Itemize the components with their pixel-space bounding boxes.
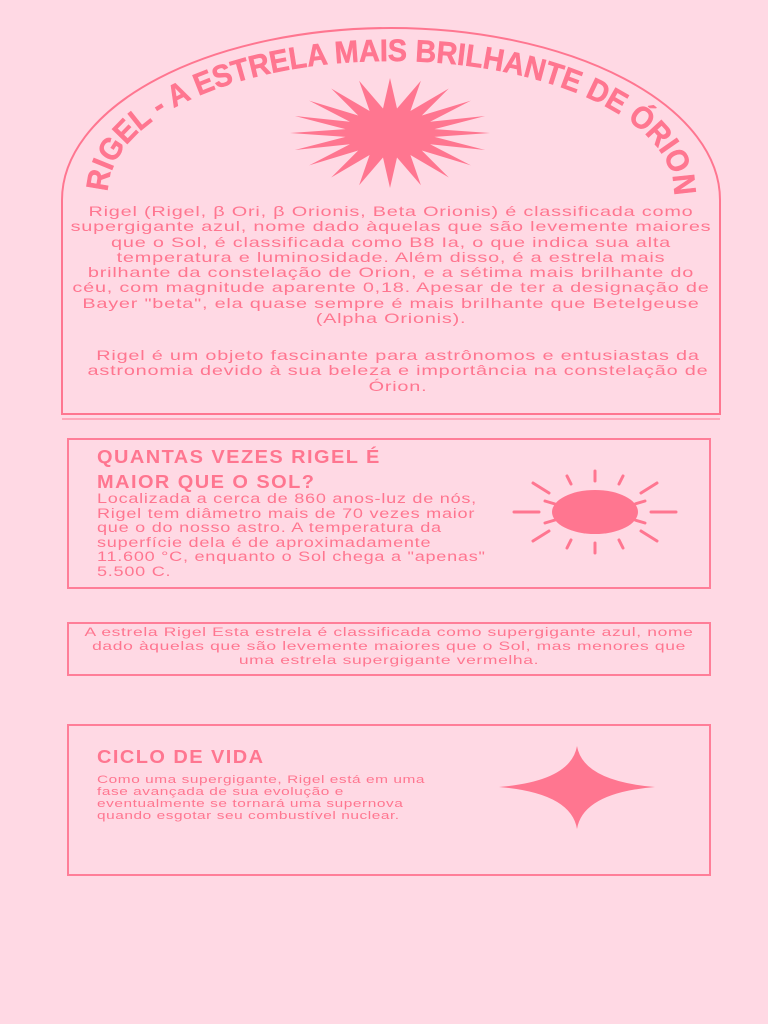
text block: eventualmente se tornará uma supernova <box>97 798 403 810</box>
intro paragraph: brilhante da constelação de Orion, e a sétima mais brilhante do <box>88 264 694 280</box>
icon: sun <box>512 470 678 554</box>
intro paragraph: supergigante azul, nome dado àquelas que são levemente maiores <box>71 218 711 234</box>
second paragraph: Rigel é um objeto fascinante para astrônomos e entusiastas da <box>96 347 700 363</box>
text block <box>97 774 425 822</box>
second paragraph <box>88 347 708 394</box>
heading <box>97 446 381 492</box>
intro paragraph: que o Sol, é classificada como B8 Ia, o que indica sua alta <box>111 234 671 250</box>
second paragraph: Órion. <box>369 378 427 394</box>
arch panel frame <box>61 27 721 420</box>
text block: 11.600 °C, enquanto o Sol chega a "apenas" <box>97 549 486 564</box>
icon: four-point star <box>500 746 654 829</box>
intro paragraph: Rigel (Rigel, β Ori, β Orionis, Beta Orionis) é classificada como <box>88 203 694 219</box>
text block: Rigel tem diâmetro mais de 70 vezes maior <box>97 506 475 520</box>
panel: size comparison <box>67 438 711 589</box>
intro paragraph <box>71 203 711 326</box>
text block: quando esgotar seu combustível nuclear. <box>97 810 400 822</box>
text block <box>97 491 486 578</box>
text block: que o do nosso astro. A temperatura da <box>97 520 442 535</box>
text block: Como uma supergigante, Rigel está em uma <box>97 774 425 786</box>
heading: MAIOR QUE O SOL? <box>97 472 315 492</box>
intro paragraph: Bayer "beta", ela quase sempre é mais brilhante que Betelgeuse <box>82 295 700 311</box>
second paragraph: astronomia devido à sua beleza e importância na constelação de <box>88 362 708 378</box>
text block: Localizada a cerca de 860 anos-luz de nós, <box>97 491 477 506</box>
intro paragraph: (Alpha Orionis). <box>316 310 466 326</box>
text block: 5.500 C. <box>97 564 171 578</box>
text block: fase avançada de sua evolução e <box>97 786 344 798</box>
text block: superfície dela é de aproximadamente <box>97 534 431 550</box>
intro paragraph: temperatura e luminosidade. Além disso, é a estrela mais <box>117 249 665 265</box>
text block <box>84 625 693 667</box>
panel: life cycle <box>67 724 711 876</box>
intro paragraph: céu, com magnitude aparente 0,18. Apesar de ter a designação de <box>72 279 710 295</box>
icon: starburst <box>290 78 490 188</box>
heading: QUANTAS VEZES RIGEL É <box>97 447 381 467</box>
title: RIGEL - A ESTRELA MAIS BRILHANTE DE ÓRION <box>86 39 696 194</box>
text block: uma estrela supergigante vermelha. <box>239 653 539 667</box>
text block: A estrela Rigel Esta estrela é classificada como supergigante azul, nome <box>85 625 693 639</box>
text block: dado àquelas que são levemente maiores que o Sol, mas menores que <box>92 639 686 653</box>
panel: classification note <box>67 622 711 676</box>
heading: CICLO DE VIDA <box>97 747 265 767</box>
